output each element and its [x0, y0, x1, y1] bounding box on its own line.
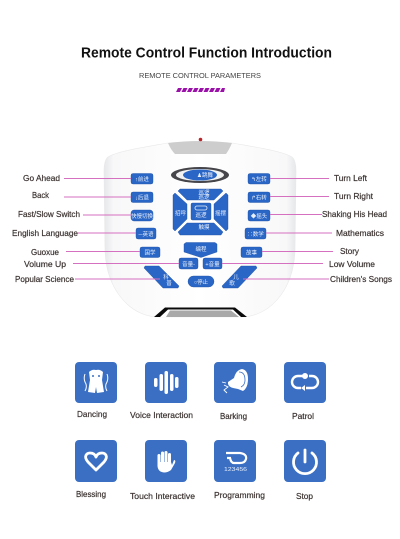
stop button: ○停止 — [194, 278, 209, 286]
left labels and leader lines: Fast/Slow Switch — [18, 209, 80, 219]
direction pad: 招呼 — [175, 209, 186, 217]
right column buttons — [241, 174, 270, 258]
science button: 科 — [163, 273, 169, 281]
direction pad — [173, 188, 228, 235]
panel: programming — [214, 440, 265, 500]
programming button — [184, 242, 217, 258]
right labels and leader lines: Shaking His Head — [322, 209, 387, 219]
right labels and leader lines — [222, 173, 392, 284]
panel: stop: Stop — [296, 491, 313, 501]
panel: programming: Programming — [214, 490, 265, 500]
left labels and leader lines: Popular Science — [15, 274, 74, 284]
top sensor cap — [168, 141, 232, 154]
right labels and leader lines: Low Volume — [329, 259, 375, 269]
title: Remote Control Function Introduction — [81, 44, 332, 62]
volume buttons — [179, 258, 222, 269]
panel: dancing: Dancing — [77, 409, 107, 419]
left column buttons — [131, 174, 160, 258]
icon: dancing robot — [84, 370, 108, 393]
right column buttons: ↱右转 — [251, 194, 267, 202]
panel: stop — [284, 440, 326, 501]
direction pad: 巡逻 — [195, 211, 207, 219]
dance button: ♟跳舞 — [197, 171, 213, 179]
left labels and leader lines: Guoxue — [31, 247, 59, 257]
right labels and leader lines: Turn Right — [334, 191, 374, 201]
left labels and leader lines: Go Ahead — [23, 173, 60, 183]
direction pad: 巡逻 — [198, 193, 210, 201]
bottom notch — [154, 308, 247, 317]
remote body — [104, 143, 296, 317]
songs button: 歌 — [229, 279, 235, 287]
left column buttons: 国学 — [144, 248, 156, 256]
right labels and leader lines: Mathematics — [336, 228, 384, 238]
panel: touch interactive: Touch Interactive — [130, 491, 195, 501]
icon: programming path: 123456 — [224, 467, 247, 473]
panel: patrol: Patrol — [292, 411, 314, 421]
direction pad: 摇摆 — [215, 209, 226, 217]
panel: patrol — [284, 362, 326, 421]
icon: barking dog — [222, 369, 248, 393]
volume buttons: +音量 — [205, 260, 220, 268]
icon: heart — [86, 453, 106, 470]
left column buttons: ↑前进 — [135, 175, 149, 183]
songs button: 儿 — [233, 274, 239, 281]
left labels and leader lines: Back — [32, 190, 50, 200]
icon: hand — [158, 451, 175, 472]
icon: patrol loop — [292, 374, 318, 391]
right labels and leader lines: Story — [340, 246, 360, 256]
volume buttons: 音量- — [182, 260, 195, 268]
right labels and leader lines: Turn Left — [334, 173, 368, 183]
programming button: 编程 — [195, 245, 207, 253]
right column buttons: 故事 — [246, 248, 257, 256]
right column buttons: ↰左转 — [251, 175, 267, 183]
panel: barking — [214, 362, 256, 421]
panel: voice interaction: Voice Interaction — [130, 410, 193, 420]
right labels and leader lines: Children's Songs — [330, 274, 392, 284]
icon: sound wave — [154, 371, 178, 394]
science button — [144, 266, 179, 288]
right column buttons: ∷数学 — [247, 230, 264, 238]
left column buttons: ↓后退 — [135, 194, 149, 202]
stop button — [188, 276, 214, 287]
left labels and leader lines — [12, 173, 179, 284]
left column buttons: 快慢切换 — [131, 212, 153, 220]
panel: touch interactive — [130, 440, 195, 501]
direction pad: 巡逻 — [198, 188, 210, 196]
decorative purple stripe bar — [176, 88, 225, 92]
left labels and leader lines: Volume Up — [24, 259, 66, 269]
left column buttons: ─英语 — [138, 230, 154, 238]
direction pad: 触摸 — [198, 223, 210, 231]
panel: blessing: Blessing — [76, 489, 106, 499]
right column buttons: ◆摇头 — [251, 212, 268, 220]
icon: power — [294, 450, 317, 474]
panel: dancing — [75, 362, 117, 419]
panel: voice interaction — [130, 362, 193, 420]
panel: barking: Barking — [220, 411, 247, 421]
remote control — [104, 138, 296, 317]
panel: blessing — [75, 440, 117, 499]
songs button — [222, 266, 257, 288]
science button: 普 — [166, 279, 172, 287]
dance button — [171, 167, 229, 183]
red indicator — [199, 138, 202, 141]
left labels and leader lines: English Language — [12, 228, 78, 238]
subtitle: REMOTE CONTROL PARAMETERS — [139, 71, 261, 80]
